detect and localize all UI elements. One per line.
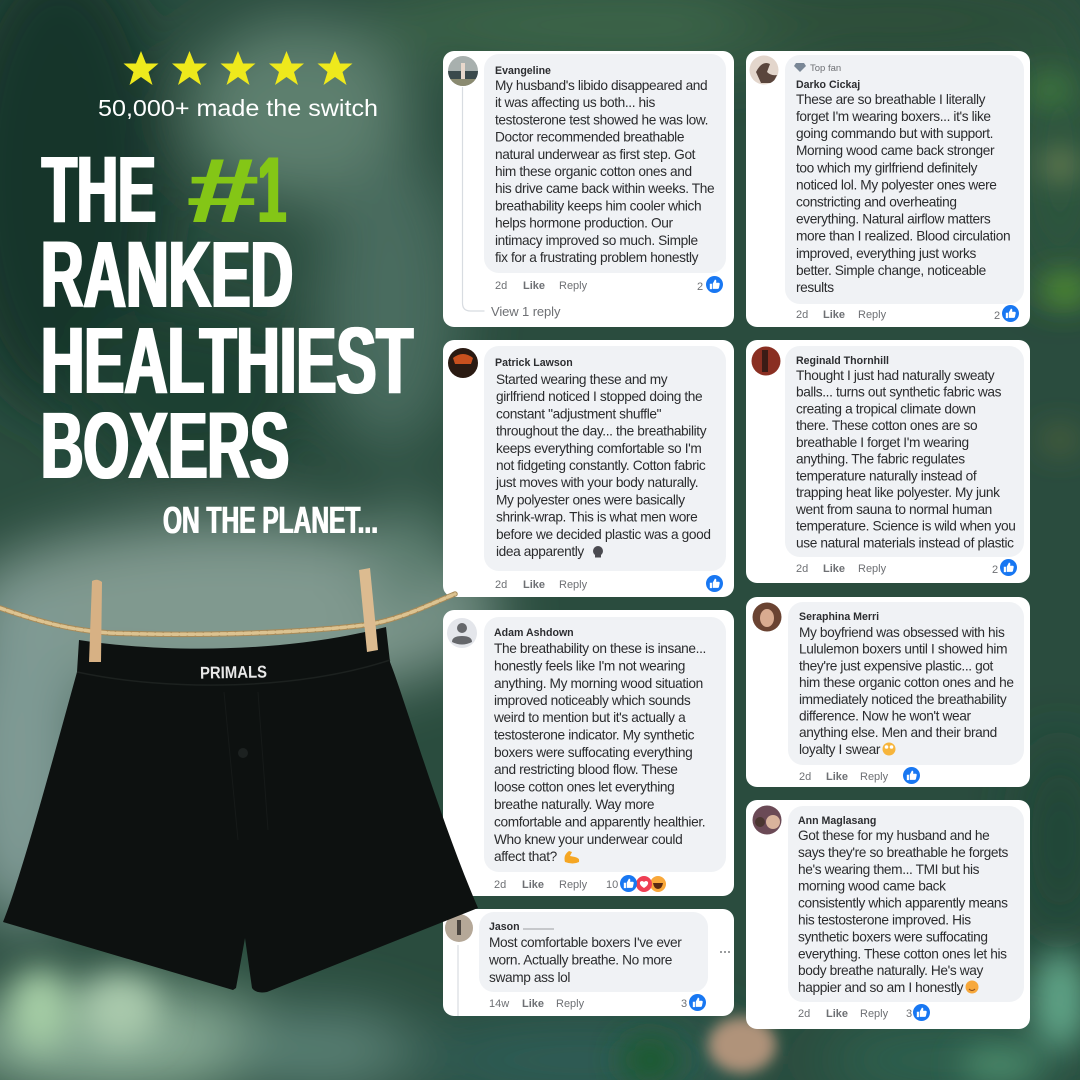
comment card: Patrick Lawson: idea apparently — [496, 544, 584, 559]
comment card: Darko Cickaj: noticed lol. My polyester ones were — [796, 177, 996, 192]
comment card: Reginald Thornhill: breathable I forget I'm wearing — [796, 435, 969, 450]
comment card: Darko Cickaj: too which my girlfriend definitely — [796, 160, 978, 175]
headline: HEALTHIEST — [41, 308, 413, 414]
comment card: Reginald Thornhill: Thought I just had naturally sweaty — [796, 368, 995, 383]
comment card: Reginald Thornhill: anything. The fabric regulates — [796, 452, 965, 467]
comment card: Ann Maglasang: consistently which apparently means — [798, 896, 1008, 911]
icon: default avatar — [447, 618, 477, 648]
comment card: Reginald Thornhill: temperature. Science is wild when you — [796, 519, 1016, 534]
comment card: Seraphina Merri: him these organic cotton ones and he — [799, 675, 1014, 690]
comment card: Seraphina Merri — [746, 597, 1030, 787]
comment card: Adam Ashdown: affect that? — [494, 849, 558, 864]
comment card: Darko Cickaj: constricting and overheating — [796, 194, 957, 210]
headline: # — [186, 140, 257, 242]
comment card: Darko Cickaj: improved, everything just works — [796, 246, 976, 261]
comment card: Evangeline: Like — [523, 280, 545, 292]
comment card: Patrick Lawson: before we decided plastic was a good — [496, 527, 711, 542]
comment card: Seraphina Merri: immediately noticed the breathability — [799, 692, 1007, 707]
comment card: Reginald Thornhill: temperature naturally instead of — [796, 468, 977, 484]
comment card: Reginald Thornhill: balls... turns out synthetic fabric was — [796, 385, 1002, 400]
comment card: Patrick Lawson: My polyester ones were basically — [496, 492, 685, 507]
comment card: Patrick Lawson: shrink-wrap. This is what men wore — [496, 510, 697, 525]
comment card: Darko Cickaj: everything. Natural airflow matters — [796, 212, 991, 227]
comment card: Ann Maglasang: body breathe naturally. He's way — [798, 963, 984, 978]
comment card: Evangeline: fix for a frustrating problem honestly — [495, 250, 699, 265]
comment card: Patrick Lawson: 2d — [495, 579, 507, 591]
icon: eye roll emoji — [882, 742, 896, 756]
comment card: Ann Maglasang — [746, 800, 1030, 1029]
subheading: ON THE PLANET... — [163, 500, 378, 542]
comment card: Jason — [443, 909, 734, 1016]
comment card: Evangeline: Doctor recommended breathable — [495, 130, 684, 145]
comment card: Evangeline: breathability keeps him cooler which — [495, 198, 701, 213]
comment card: Patrick Lawson: not fidgeting constantly. Cotton fabric — [496, 458, 706, 473]
five star rating — [124, 51, 352, 85]
comment card: Adam Ashdown: breathe naturally. Way more — [494, 797, 654, 812]
comment card: Patrick Lawson: girlfriend noticed I stopped doing the — [496, 389, 702, 404]
comment card: Evangeline — [443, 51, 734, 327]
comment card: Adam Ashdown: Like — [522, 879, 544, 891]
button — [238, 748, 248, 758]
comment card: Ann Maglasang: 2d — [798, 1008, 810, 1020]
comment card: Ann Maglasang: happier and so am I honestly — [798, 980, 964, 995]
comment card: Evangeline: My husband's libido disappeared and — [495, 78, 707, 93]
comment card: Ann Maglasang: Like — [826, 1008, 848, 1020]
comment card: Patrick Lawson: Started wearing these and my — [496, 372, 668, 387]
comment card: Ann Maglasang: he's wearing them... TMI but his — [798, 862, 980, 877]
comment card: Jason: swamp ass lol — [489, 970, 570, 985]
comment card: Darko Cickaj — [746, 51, 1030, 327]
comment card: Reginald Thornhill: 2d — [796, 563, 808, 575]
comment card: Jason: Jason — [489, 921, 520, 933]
headline: THE — [42, 137, 156, 243]
comment card: Reginald Thornhill: use natural materials instead of plastic — [796, 536, 1014, 550]
comment card: Reginald Thornhill: Reginald Thornhill — [796, 355, 889, 367]
comment card: Jason: Reply — [556, 998, 585, 1010]
comment card: Evangeline: natural underwear as first step. Got — [495, 147, 696, 162]
comment card: Jason: 14w — [489, 998, 509, 1010]
icon: muscle emoji — [564, 851, 579, 864]
comment card: Reginald Thornhill: Like — [823, 563, 845, 575]
more options dots — [720, 951, 730, 953]
comment card: Patrick Lawson: Like — [523, 579, 545, 591]
icon: smile emoji — [966, 980, 978, 994]
comment card: Patrick Lawson: keeps everything comfortable so I'm — [496, 441, 701, 456]
comment card: Darko Cickaj: 2 — [994, 310, 1000, 322]
comment card: Adam Ashdown: loose cotton ones let everything — [494, 780, 674, 795]
comment card: Darko Cickaj: Reply — [858, 309, 887, 321]
comment card: Adam Ashdown: Reply — [559, 879, 588, 891]
comment card: Jason: Most comfortable boxers I've ever — [489, 935, 682, 950]
icon: skull emoji — [593, 546, 603, 558]
clothesline rope — [0, 594, 455, 634]
comment card: Darko Cickaj: forget I'm wearing boxers... it's like — [796, 109, 991, 124]
comment card: Darko Cickaj: going commando but with support. — [796, 126, 993, 141]
comment card: Patrick Lawson: Reply — [559, 579, 588, 591]
comment card: Ann Maglasang: 3 — [906, 1008, 912, 1020]
comment card: Reginald Thornhill: 2 — [992, 564, 998, 576]
comment card: Seraphina Merri: they're just expensive plastic... got — [799, 658, 994, 673]
product: black boxers — [3, 627, 478, 992]
comment card: Evangeline: View 1 reply — [491, 304, 561, 319]
comment card: Evangeline: it was affecting us both... his — [495, 95, 655, 110]
right clothespin — [359, 568, 378, 652]
comment card: Adam Ashdown: comfortable and apparently healthier. — [494, 814, 705, 829]
comment card: Ann Maglasang: Ann Maglasang — [798, 815, 876, 827]
comment card: Ann Maglasang: Got these for my husband and he — [798, 828, 989, 843]
comment card: Evangeline: 2d — [495, 280, 507, 292]
comment card: Evangeline: 2 — [697, 281, 703, 293]
comment card: Adam Ashdown: testosterone indicator. My synthetic — [494, 727, 695, 742]
comment card: Darko Cickaj: results — [796, 280, 834, 295]
comment card: Patrick Lawson: Patrick Lawson — [495, 357, 573, 369]
headline: RANKED — [41, 222, 293, 328]
comment card: Jason: 3 — [681, 998, 687, 1010]
comment card: Evangeline: helps hormone production. Our — [495, 216, 673, 231]
comment card: Darko Cickaj: more than I realized. Blood circulation — [796, 229, 1010, 244]
comment card: Adam Ashdown: boxers were suffocating everything — [494, 745, 692, 760]
comment card: Darko Cickaj: 2d — [796, 309, 808, 321]
comment card: Adam Ashdown: 10 — [606, 879, 618, 891]
comment card: Jason: worn. Actually breathe. No more — [488, 952, 672, 968]
comment card: Adam Ashdown: weird to mention but it's actually a — [493, 710, 686, 725]
social proof line: 50,000+ made the switch — [98, 95, 378, 121]
comment card: Evangeline: intimacy improved so much. Simple — [495, 233, 698, 248]
comment card: Reginald Thornhill: went from sauna to normal human — [795, 502, 992, 517]
jason avatar — [445, 914, 473, 942]
comment card: Adam Ashdown: improved noticeably which sounds — [494, 693, 691, 708]
comment card: Reginald Thornhill: creating a tropical climate down — [796, 402, 976, 416]
comment card: Reginald Thornhill: Reply — [858, 563, 887, 575]
comment card: Ann Maglasang: synthetic boxers were suffocating — [798, 929, 988, 944]
comment card: Adam Ashdown: anything. My morning wood situation — [494, 676, 703, 691]
comment card: Seraphina Merri: Seraphina Merri — [799, 611, 879, 623]
comment card: Ann Maglasang: everything. These cotton ones let his — [798, 946, 1007, 961]
comment card: Darko Cickaj: Like — [823, 309, 845, 321]
comment card: Seraphina Merri: anything else. Men and their brand — [799, 725, 997, 740]
comment card: Evangeline: him these organic cotton ones and — [495, 164, 692, 179]
comment card: Adam Ashdown: 2d — [494, 879, 506, 891]
comment card: Adam Ashdown: Who knew your underwear could — [494, 832, 682, 847]
comment card: Darko Cickaj: Morning wood came back stronger — [796, 143, 995, 158]
reactions — [620, 875, 666, 892]
headline — [41, 137, 413, 499]
comment card: Ann Maglasang: his testosterone improved. His — [798, 912, 971, 928]
comment card: Evangeline: Evangeline — [495, 65, 551, 77]
comment card: Seraphina Merri: loyalty I swear — [799, 742, 881, 757]
comment card: Seraphina Merri: Reply — [860, 771, 889, 783]
comment card: Seraphina Merri: Lululemon boxers until I showed him — [799, 642, 1007, 657]
left clothespin — [89, 580, 102, 662]
comment card: Ann Maglasang: says they're so breathable he forgets — [798, 845, 1009, 860]
comment card: Darko Cickaj: Darko Cickaj — [796, 79, 860, 91]
comment card: Patrick Lawson — [443, 340, 734, 597]
comment card: Seraphina Merri: My boyfriend was obsessed with his — [799, 625, 1005, 640]
comment card: Evangeline: his drive came back within weeks. The — [495, 181, 714, 196]
comment card: Adam Ashdown — [443, 610, 734, 896]
icon: top fan diamond — [794, 63, 806, 72]
comment card: Darko Cickaj: better. Simple change, noticeable — [796, 263, 986, 278]
comment card: Adam Ashdown: The breathability on these is insane... — [494, 641, 706, 656]
comment card: Adam Ashdown: honestly feels like I'm not wearing — [494, 658, 685, 673]
headline: BOXERS — [41, 393, 289, 499]
comment card: Seraphina Merri: Like — [826, 771, 848, 783]
comment card: Reginald Thornhill — [746, 340, 1030, 583]
comment card: Patrick Lawson: constant "adjustment shuffle" — [496, 406, 662, 421]
comment card: Ann Maglasang: Reply — [860, 1008, 889, 1020]
comment card: Evangeline: testosterone test showed he was low. — [495, 112, 708, 127]
comment card: Patrick Lawson: just moves with your body naturally. — [495, 475, 698, 490]
comment card: Darko Cickaj: Top fan — [810, 63, 841, 74]
comment card: Adam Ashdown: Adam Ashdown — [494, 627, 574, 639]
comment card: Seraphina Merri: 2d — [799, 771, 811, 783]
comment card: Jason: Like — [522, 998, 544, 1010]
comment card: Reginald Thornhill: there. These cotton ones are so — [796, 418, 978, 433]
comment card: Adam Ashdown: and restricting blood flow. These — [494, 762, 678, 777]
comment card: Reginald Thornhill: trapping heat like polyester. My junk — [796, 485, 1000, 500]
brand label: PRIMALS — [200, 662, 267, 683]
comment card: Patrick Lawson: throughout the day... the breathability — [496, 424, 707, 439]
comment card: Seraphina Merri: difference. Now he won't wear — [799, 708, 971, 724]
comment card: Ann Maglasang: morning wood came back — [798, 879, 946, 894]
comment card: Darko Cickaj: These are so breathable I literally — [796, 92, 986, 107]
headline: 1 — [258, 137, 286, 242]
comment card: Evangeline: Reply — [559, 280, 588, 292]
